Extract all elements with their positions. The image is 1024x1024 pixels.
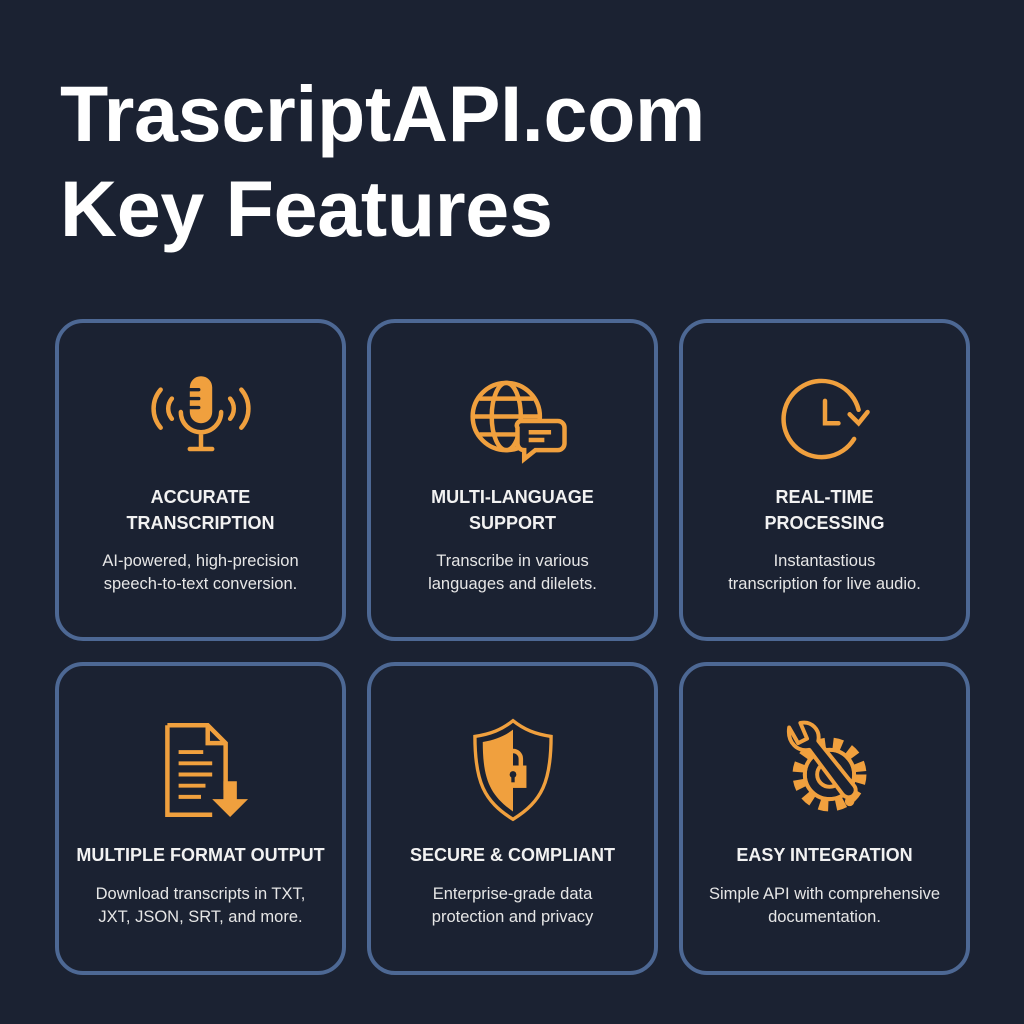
description: Download transcripts in TXT, (96, 885, 305, 903)
panel: easy integration (679, 662, 970, 975)
title: Key Features (60, 164, 553, 253)
heading: SECURE & COMPLIANT (410, 845, 615, 865)
icon: microphone (151, 376, 251, 452)
icon: wrench gear (786, 720, 866, 812)
description (428, 552, 597, 593)
heading: ACCURATE (151, 487, 250, 507)
description: Instantastious (774, 552, 875, 570)
panel: accurate transcription (55, 319, 346, 641)
description (96, 885, 305, 926)
description (709, 885, 940, 926)
description (102, 552, 299, 593)
heading: PROCESSING (764, 513, 885, 533)
panel: multiple format (55, 662, 346, 975)
panel: real-time (679, 319, 970, 641)
icon: shield lock (473, 718, 553, 822)
heading (431, 487, 594, 533)
panel: multi-language (367, 319, 658, 641)
description: transcription for live audio. (728, 575, 921, 593)
heading: REAL-TIME (776, 487, 874, 507)
description: documentation. (768, 908, 881, 926)
description: Transcribe in various (436, 552, 589, 570)
panel: secure (367, 662, 658, 975)
description: speech-to-text conversion. (104, 575, 297, 593)
description: protection and privacy (432, 908, 593, 926)
heading (126, 487, 274, 533)
heading: MULTI-LANGUAGE (431, 487, 594, 507)
description: AI-powered, high-precision (102, 552, 299, 570)
heading: EASY INTEGRATION (736, 845, 913, 865)
description (728, 552, 921, 593)
heading (764, 487, 885, 533)
description: JXT, JSON, SRT, and more. (98, 908, 303, 926)
heading: SUPPORT (469, 513, 556, 533)
icon: clock (781, 378, 870, 460)
description: Enterprise-grade data (433, 885, 592, 903)
title (60, 69, 705, 253)
description: Simple API with comprehensive (709, 885, 940, 903)
heading: TRANSCRIPTION (126, 513, 274, 533)
icon: document download (165, 723, 248, 817)
description (432, 885, 594, 926)
icon: globe chat (470, 380, 567, 464)
heading: MULTIPLE FORMAT OUTPUT (76, 845, 325, 865)
description: languages and dilelets. (428, 575, 597, 593)
title: TrascriptAPI.com (60, 69, 705, 158)
